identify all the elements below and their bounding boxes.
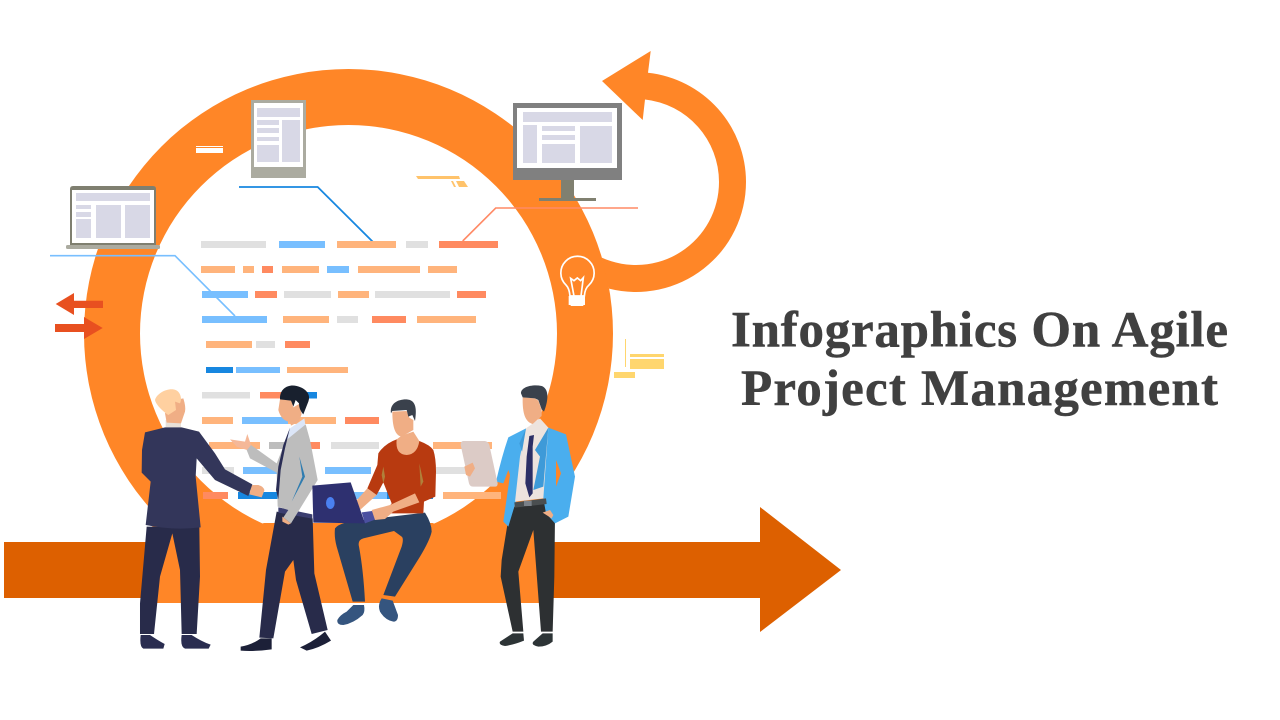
icon: desktop monitor [513,103,622,201]
task bars gantt chart [201,241,501,499]
connector line: monitor [463,208,638,241]
person: man in grey jacket, walking [230,386,331,651]
icon: laptop [66,186,160,249]
title [731,302,1228,417]
dark orange timeline arrow [4,507,841,632]
icon: red exchange arrows [55,293,103,339]
title: Infographics On Agile [731,302,1228,358]
person: standing man in blue blazer with clipboard [461,385,575,647]
connector line: tablet [239,187,373,242]
icon: tablet [251,100,306,178]
orange agile cycle ring [84,69,613,603]
icon: yellow marks top [416,176,468,187]
icon: small white marks on ring [196,146,223,153]
person: seated man in red sweater with laptop [312,399,436,625]
icon: light bulb [561,256,594,306]
person: man in navy suit, back view [140,389,264,649]
connector line: laptop [50,256,235,316]
title: Project Management [741,361,1218,417]
return loop arrow [602,51,746,292]
icon: yellow marks right [614,339,664,378]
